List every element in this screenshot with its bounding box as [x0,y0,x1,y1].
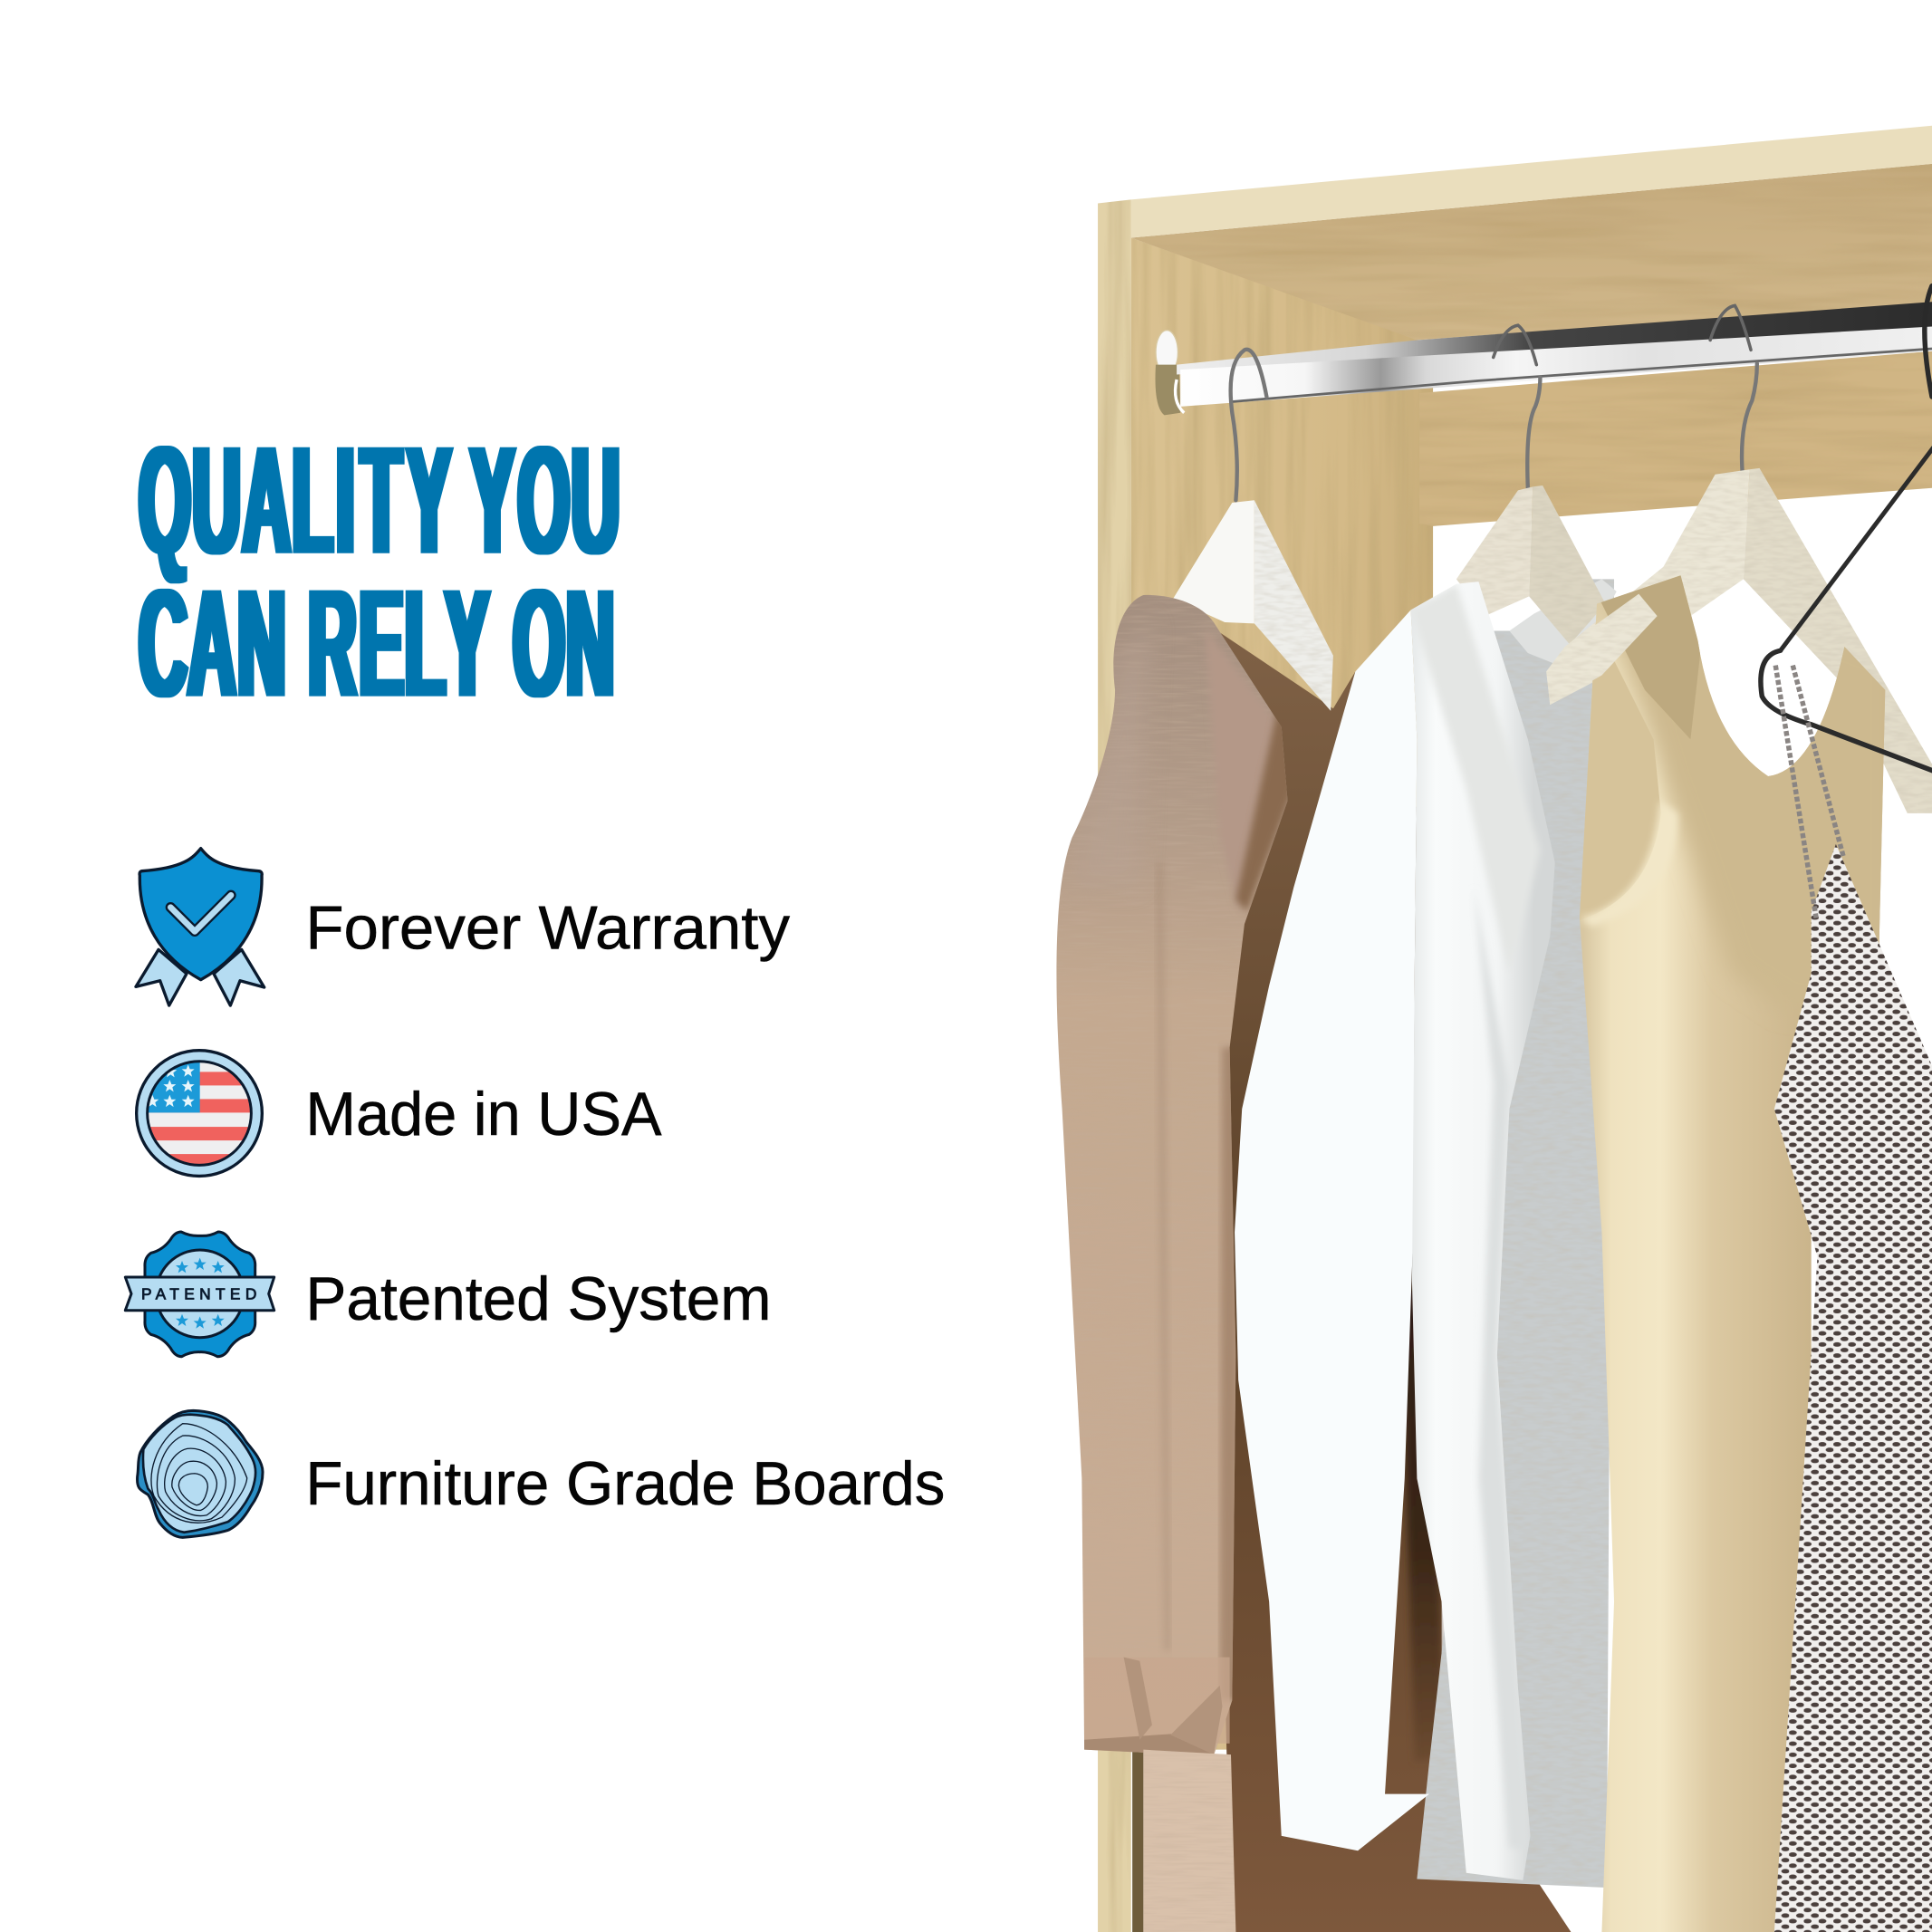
light wood hanger middle [1456,485,1606,644]
white jacket front panel [1411,582,1555,1880]
rod front face [1180,326,1932,407]
rod lower shadow line [1232,349,1932,401]
chrome closet rod [1155,302,1932,415]
photo: closet with hanging clothes [1056,126,1932,1932]
tan coat with sleeve [1056,595,1306,1755]
title: CAN RELY ON [139,556,614,729]
label: forever warranty: Forever Warranty [305,893,790,962]
cabinet lower dark strip [1132,1750,1143,1932]
closet cabinet [1098,126,1932,1932]
cabinet top underside [1131,164,1932,340]
light wood hanger right [1546,468,1932,813]
icon: patented badge: PATENTED [141,1284,256,1302]
rod bracket [1155,331,1184,415]
label: made in usa: Made in USA [305,1080,662,1149]
cabinet top front edge [1131,126,1932,238]
icon: shield with check and ribbons [136,849,264,1005]
item: patented system [125,1232,772,1357]
brown garment behind [1214,629,1571,1932]
item: furniture grade boards [138,1410,945,1537]
cream sleeveless dress [1575,573,1898,1932]
item: forever warranty [136,849,790,1005]
lower coat panel [1143,1750,1235,1932]
icon: wood tree rings [138,1410,263,1537]
label: furniture grade boards: Furniture Grade Boards [305,1449,945,1518]
cabinet side front edge [1098,199,1131,1932]
hanger tip in front of dress strap [1546,594,1658,705]
title: QUALITY YOU [139,413,620,586]
white hanger [1173,500,1333,711]
icon: patented badge [125,1232,274,1357]
feature list [125,849,945,1537]
item: made in usa [137,1051,662,1176]
black wire hanger [1761,446,1932,772]
rod top face [1177,302,1932,375]
cabinet inner side wall [1131,238,1433,1750]
light gray shirt [1417,579,1617,1888]
coat cuff [1084,1658,1230,1755]
title [139,413,620,729]
cabinet back board [1419,351,1932,526]
checkered dress [1774,666,1932,1932]
icon: american flag badge [137,1051,262,1176]
label: patented system: Patented System [305,1264,772,1333]
hanger hooks [1231,286,1932,500]
dark gap between shirts [1399,1220,1444,1762]
white shirt sleeve [1235,610,1429,1850]
